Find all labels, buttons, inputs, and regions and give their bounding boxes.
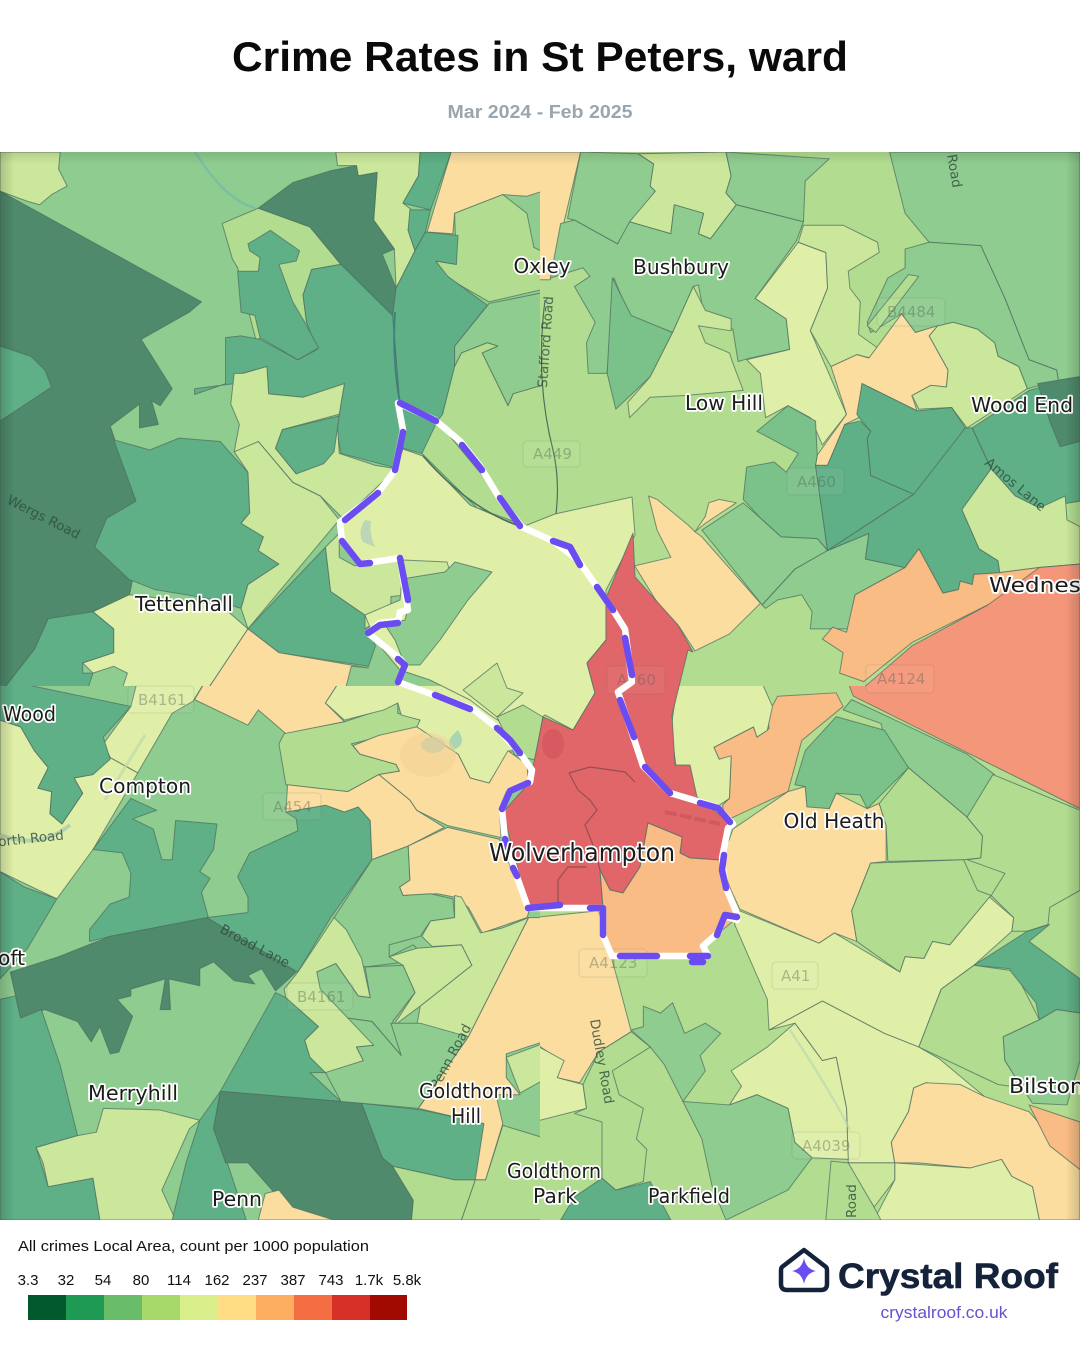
legend colour scale — [28, 1295, 407, 1320]
street names: Broad Lane — [217, 921, 292, 971]
street names — [0, 153, 1049, 1218]
legend tick labels: 162 — [204, 1272, 230, 1289]
place labels — [0, 254, 1080, 1211]
place labels: Park — [533, 1184, 577, 1208]
place labels: Old Heath — [784, 809, 884, 833]
place labels: Compton — [99, 774, 191, 798]
street names: Dudley Road — [586, 1018, 617, 1105]
legend tick labels: 3.3 — [18, 1272, 38, 1289]
street names: Road — [844, 1184, 860, 1218]
place labels: Wood — [3, 702, 56, 726]
legend — [18, 1238, 422, 1320]
water, parks and central details — [0, 152, 850, 1130]
street names: Penn Road — [427, 1021, 475, 1092]
road labels: A4124 — [877, 670, 925, 688]
road labels: B4161 — [138, 691, 186, 709]
street names: Amos Lane — [981, 455, 1049, 515]
road labels: A41 — [781, 967, 810, 985]
road labels: A460 — [797, 473, 836, 491]
legend tick labels: 1.7k — [355, 1272, 384, 1289]
place labels: Hill — [451, 1104, 481, 1128]
place labels: Merryhill — [88, 1081, 178, 1105]
place labels: Goldthorn — [507, 1159, 601, 1183]
logo: Crystal Roof — [781, 1250, 1058, 1322]
legend tick labels: 32 — [58, 1272, 74, 1289]
place labels: Bilston — [1009, 1074, 1080, 1098]
logo wordmark: Crystal Roof — [838, 1257, 1058, 1296]
place labels: Parkfield — [648, 1184, 730, 1208]
road labels: B4161 — [297, 988, 345, 1006]
choropleth map — [0, 152, 1080, 1220]
road labels — [128, 298, 945, 1159]
road labels: A454 — [273, 798, 312, 816]
place labels: Bushbury — [633, 255, 729, 279]
legend tick labels: 114 — [167, 1272, 191, 1289]
road labels: B4484 — [887, 303, 935, 321]
road labels: A460 — [617, 671, 656, 689]
place labels: Low Hill — [685, 391, 763, 415]
legend tick labels: 5.8k — [393, 1272, 422, 1289]
street names: Road — [943, 153, 965, 189]
ward boundary: St Peters — [340, 403, 737, 962]
place labels: Tettenhall — [134, 592, 233, 616]
legend tick labels — [18, 1272, 422, 1289]
street names: Wergs Road — [4, 492, 83, 543]
road labels: A4039 — [802, 1137, 850, 1155]
legend tick labels: 743 — [318, 1272, 344, 1289]
place labels: Oxley — [514, 254, 571, 278]
subtitle: date range: Mar 2024 - Feb 2025 — [448, 101, 632, 122]
place labels: Penn — [212, 1187, 262, 1211]
icon: house with star — [781, 1250, 827, 1290]
place labels: Wednesf — [989, 573, 1080, 597]
place labels: Goldthorn — [419, 1079, 513, 1103]
legend tick labels: 80 — [133, 1272, 149, 1289]
legend tick labels: 54 — [95, 1272, 111, 1289]
place labels: Wolverhampton — [489, 838, 675, 867]
street names: Stafford Road — [535, 296, 557, 388]
road labels: A449 — [533, 445, 572, 463]
title: Crime Rates in St Peters, ward — [232, 33, 848, 80]
legend title: All crimes Local Area, count per 1000 population — [18, 1238, 369, 1255]
legend tick labels: 387 — [280, 1272, 306, 1289]
website: crystalroof.co.uk — [880, 1304, 1008, 1322]
place labels: Wood End — [971, 393, 1073, 417]
legend tick labels: 237 — [242, 1272, 268, 1289]
road labels: A4123 — [589, 954, 637, 972]
